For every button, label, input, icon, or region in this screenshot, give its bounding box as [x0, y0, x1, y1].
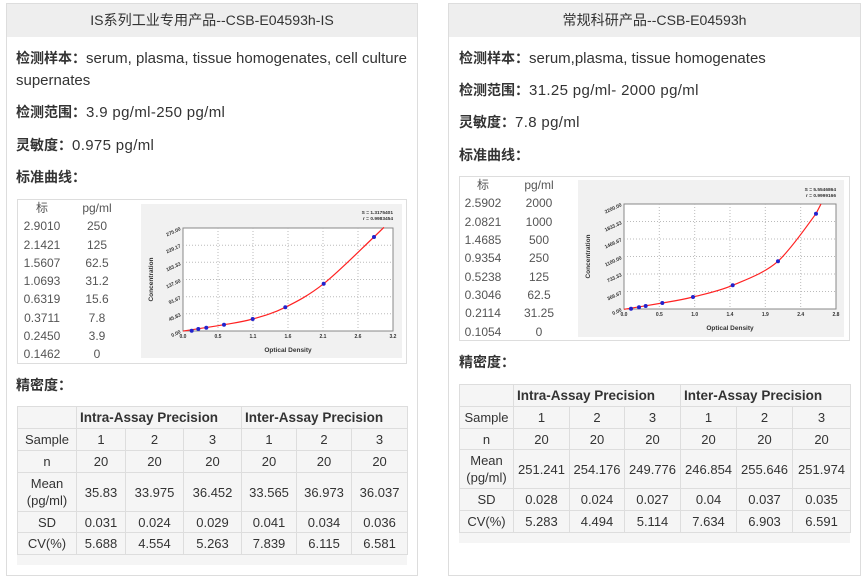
precision table, right: 20	[701, 432, 716, 446]
standard curve data table, left: 125	[87, 238, 107, 252]
precision table, left: 36.037	[360, 484, 399, 500]
standard curve data table, left	[24, 201, 112, 361]
chart: standard curve, right: Concentration	[585, 234, 592, 279]
precision table, left: 33.975	[135, 484, 174, 500]
text: detection range, left: 检测范围：3.9 pg/ml-250 pg/ml	[16, 104, 225, 121]
precision table, left: 7.839	[253, 536, 285, 551]
chart: standard curve, left: 0.5	[215, 334, 222, 340]
precision table, left: Sample	[25, 432, 69, 447]
heading: standard curve, right: 标准曲线：	[459, 147, 529, 163]
precision table, right: 3	[818, 410, 825, 425]
precision table, left: n	[43, 454, 51, 469]
precision table, right: 0.04	[696, 492, 721, 507]
precision table, right: SD	[477, 492, 496, 507]
precision table, left: (pg/ml)	[27, 493, 67, 508]
chart: standard curve, left: Concentration	[148, 257, 155, 302]
panel heading: IS series	[7, 4, 417, 37]
standard curve data table, left: pg/ml	[82, 201, 112, 215]
precision table, left: 20	[147, 454, 162, 469]
precision table, right: 0.037	[748, 492, 781, 507]
chart: standard curve, left: S = 1.3175401	[362, 210, 393, 216]
precision table, right: 1	[705, 410, 712, 425]
chart: standard curve, left: r = 0.9983454	[363, 216, 393, 222]
precision table, left: 5.263	[196, 536, 229, 551]
precision table, right: 20	[590, 432, 604, 446]
precision table, right: 5.283	[525, 514, 558, 529]
panel heading: regular research: 常规科研产品--CSB-E04593h	[562, 12, 747, 28]
precision table, right: 255.646	[741, 462, 788, 476]
chart: standard curve, right: 1833.33	[604, 220, 623, 233]
text: detection sample, right: 检测样本：serum,plasma, tissue homogenates	[459, 50, 766, 67]
precision table, left: 20	[317, 454, 331, 469]
precision table, right: 3	[649, 410, 656, 425]
precision table, left	[17, 406, 408, 555]
precision table, right: 20	[757, 432, 772, 446]
precision table, right: 7.634	[692, 514, 725, 529]
chart: standard curve, right: 0.5	[656, 312, 663, 318]
precision table, left: 3	[209, 432, 216, 447]
chart: standard curve, right: 1466.67	[604, 237, 623, 250]
precision table, right: 20	[814, 432, 829, 446]
standard curve data table, right: 0	[536, 325, 542, 339]
standard curve data table, left: 1.5607	[24, 256, 60, 270]
standard curve data table, left: 7.8	[89, 311, 105, 325]
precision table, left: Mean	[31, 476, 63, 491]
text: detection range, right: 检测范围：31.25 pg/ml- 2000 pg/ml	[459, 82, 699, 99]
precision table, left: 36.973	[304, 484, 344, 500]
precision table, left: 20	[372, 454, 387, 469]
precision table, left: CV(%)	[28, 536, 66, 551]
text: detection sample, left	[16, 50, 407, 89]
table background strip, left	[17, 554, 407, 565]
precision table, right: 5.114	[637, 514, 668, 529]
panel heading: regular research	[449, 4, 860, 37]
precision table, left: 6.581	[363, 536, 396, 551]
precision table, right: Sample	[464, 410, 509, 425]
chart: standard curve, left: 2.6	[355, 334, 362, 340]
precision table, left: 33.565	[249, 484, 289, 500]
precision table, left: 6.115	[308, 536, 340, 551]
standard curve data table, right: 1000	[526, 215, 552, 229]
chart: standard curve, right: 2200.00	[604, 202, 623, 215]
precision table, left: 2	[151, 432, 158, 447]
precision table, left: Intra-Assay Precision	[80, 410, 218, 425]
standard curve frame, left	[17, 199, 407, 364]
precision table, right: n	[483, 432, 490, 446]
standard curve data table, left: 0.2450	[24, 329, 60, 343]
precision table, left: 0.041	[253, 514, 285, 530]
standard curve data table, left: 250	[87, 219, 107, 233]
standard curve data table, left: 15.6	[85, 292, 109, 306]
text: sensitivity, right: 灵敏度：7.8 pg/ml	[459, 114, 580, 131]
precision table, right: 20	[534, 432, 549, 446]
chart: standard curve, left: 91.67	[168, 295, 182, 306]
text: detection sample, left: supernates	[16, 72, 90, 89]
chart: standard curve, left: 45.83	[168, 312, 182, 323]
chart: standard curve, left: 275.00	[165, 226, 182, 238]
chart: standard curve, left: 2.1	[320, 334, 327, 340]
chart: standard curve, right: Optical Density	[706, 325, 754, 332]
standard curve frame, right	[459, 176, 850, 341]
precision table, right: Mean	[470, 453, 503, 468]
precision table, left: 36.452	[193, 484, 232, 500]
standard curve data table, right: 0.9354	[465, 251, 501, 265]
standard curve data table, right: 62.5	[527, 288, 551, 302]
standard curve data table, right: 250	[529, 251, 549, 265]
precision table, left: 0.024	[138, 514, 171, 530]
precision table, left: 3	[376, 432, 383, 447]
precision table, right: 6.903	[748, 514, 781, 529]
precision table, right: 251.974	[798, 462, 845, 476]
precision table, right: CV(%)	[467, 514, 506, 529]
precision table, left: 20	[205, 454, 220, 469]
standard curve data table, right: 0.5238	[465, 270, 501, 284]
precision table, right: Intra-Assay Precision	[517, 388, 655, 403]
chart: standard curve, right: 0.00	[611, 307, 623, 317]
standard curve data table, right: 500	[529, 233, 549, 247]
precision table, right: 251.241	[518, 462, 565, 476]
precision table, left: 2	[320, 432, 328, 447]
text: detection sample, left: 检测样本：serum, plasma, tissue homogenates, cell culture	[16, 50, 407, 67]
precision table, right: (pg/ml)	[466, 470, 507, 485]
chart: standard curve, right: S = 5.5546864	[805, 187, 836, 193]
standard curve data table, left: 2.1421	[24, 238, 60, 252]
chart: standard curve, left: 3.2	[390, 334, 397, 340]
chart: standard curve, right: r = 0.9999166	[806, 193, 836, 199]
standard curve data table, right: 125	[529, 270, 549, 284]
chart: standard curve, right: 1.4	[727, 312, 734, 318]
standard curve data table, right: 0.2114	[465, 306, 501, 320]
text: sensitivity, left: 灵敏度：0.975 pg/ml	[16, 137, 154, 154]
chart: standard curve, right: 1100.00	[604, 255, 623, 268]
precision table, right: 0.035	[805, 492, 838, 507]
chart: standard curve, left: 0.00	[170, 329, 182, 339]
standard curve data table, left: 1.0693	[24, 274, 60, 288]
standard curve data table, left: 2.9010	[24, 219, 60, 233]
standard curve data table, right: 2.5902	[465, 196, 501, 210]
chart: standard curve, right: 0.0	[621, 312, 628, 318]
chart: standard curve, right: 1.9	[762, 312, 769, 318]
chart: standard curve, left: 1.1	[250, 334, 257, 340]
standard curve data table, left: 0.3711	[24, 311, 60, 325]
chart: standard curve, right: 2.8	[833, 312, 840, 318]
standard curve data table, left: 0	[94, 347, 100, 361]
chart: standard curve, left: 1.6	[285, 334, 292, 340]
precision table, right: 254.176	[574, 462, 620, 476]
precision table, left: 1	[97, 432, 105, 447]
precision table, right: 249.776	[629, 462, 676, 476]
standard curve data table, right: pg/ml	[524, 178, 554, 192]
standard curve data table, left: 3.9	[89, 329, 105, 343]
precision table, right: Inter-Assay Precision	[684, 388, 822, 403]
standard curve data table, right: 0.3046	[465, 288, 501, 302]
precision table, left: 5.688	[85, 536, 117, 551]
precision table, left: 1	[265, 432, 273, 447]
precision table, right: 2	[593, 410, 601, 425]
chart: standard curve, right: 733.33	[606, 272, 623, 284]
chart: standard curve, left: 137.50	[165, 278, 182, 290]
panel: IS series product	[6, 3, 418, 576]
chart: standard curve, left: 183.33	[165, 261, 182, 273]
standard curve data table, left: 31.2	[85, 274, 109, 288]
precision table, right: 0.028	[525, 492, 558, 507]
chart: standard curve, left: 0.0	[180, 334, 187, 340]
precision table, right: 4.494	[581, 514, 613, 529]
standard curve data table, right: 2.0821	[465, 215, 501, 229]
precision table, left: 0.034	[308, 514, 340, 530]
heading: precision, right: 精密度：	[459, 354, 515, 370]
table background strip, right	[459, 532, 850, 543]
chart: standard curve, left: Optical Density	[264, 347, 312, 354]
standard curve data table, right: 标	[477, 178, 489, 192]
standard curve data table, left: 标	[36, 201, 48, 215]
precision table, right: 6.591	[805, 514, 838, 529]
precision table, left: Inter-Assay Precision	[245, 410, 383, 425]
standard curve data table, right: 31.25	[524, 306, 554, 320]
precision table, left: SD	[38, 514, 56, 530]
standard curve data table, left: 62.5	[85, 256, 109, 270]
standard curve data table, right	[465, 178, 554, 339]
precision table, right: 246.854	[685, 462, 732, 476]
precision table, left: 20	[262, 454, 276, 469]
standard curve data table, right: 2000	[526, 196, 552, 210]
precision table, left: 4.554	[138, 536, 171, 551]
precision table, right: 0.027	[636, 492, 669, 507]
precision table, left: 35.83	[85, 484, 117, 500]
precision table, left: 20	[94, 454, 108, 469]
chart: standard curve, left: 229.17	[165, 243, 182, 255]
precision table, left: 0.029	[196, 514, 229, 530]
standard curve data table, right: 1.4685	[465, 233, 501, 247]
standard curve data table, right: 0.1054	[465, 325, 501, 339]
precision table, right: 0.024	[581, 492, 613, 507]
chart: standard curve, right: 2.4	[797, 312, 804, 318]
panel: regular research product	[448, 3, 861, 576]
precision table, left: 0.031	[85, 514, 117, 530]
chart: standard curve, right: 1.0	[691, 312, 698, 318]
standard curve data table, left: 0.6319	[24, 292, 60, 306]
panel heading: IS series: IS系列工业专用产品--CSB-E04593h-IS	[90, 12, 334, 28]
chart: standard curve, right: 366.67	[606, 290, 623, 302]
precision table, right: 1	[538, 410, 545, 425]
heading: standard curve, left: 标准曲线：	[16, 169, 86, 185]
heading: precision, left: 精密度：	[16, 377, 72, 393]
standard curve data table, left: 0.1462	[24, 347, 60, 361]
precision table, left: 0.036	[363, 514, 396, 530]
precision table, right: 20	[645, 432, 660, 446]
precision table, right	[459, 384, 851, 533]
precision table, right: 2	[761, 410, 768, 425]
